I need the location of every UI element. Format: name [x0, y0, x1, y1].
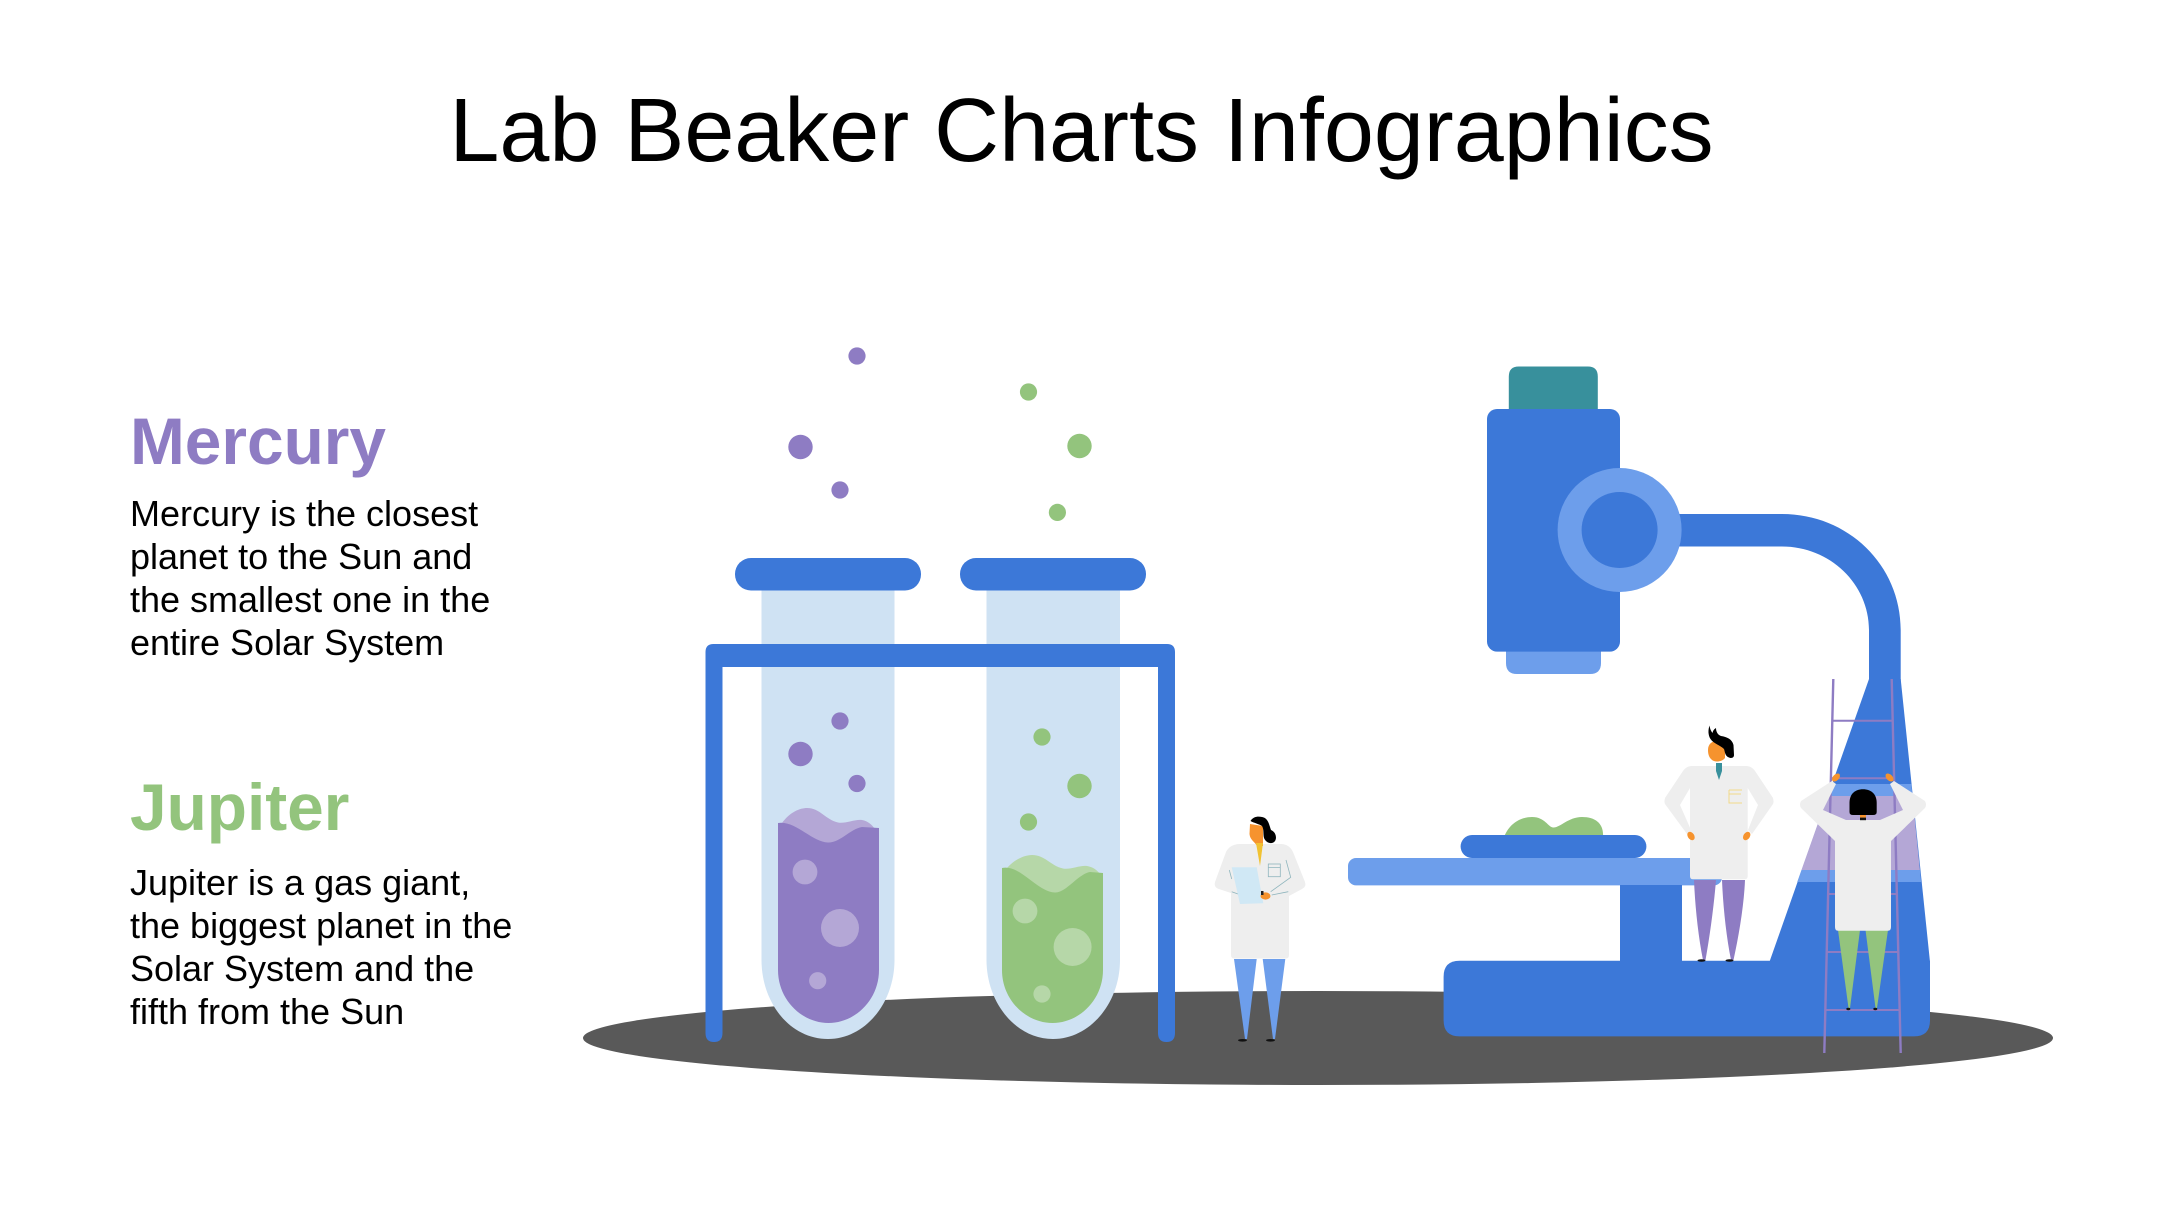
- text block: Jupiter description: fifth from the Sun: [130, 991, 404, 1032]
- panel: Mercury text: [130, 404, 490, 663]
- tube cap: [960, 558, 1146, 590]
- liquid foam: [782, 808, 875, 846]
- liquid: [778, 823, 879, 1023]
- text block: Mercury description: the smallest one in the: [130, 579, 490, 620]
- legs: [1838, 930, 1888, 1008]
- text block: Jupiter description: Jupiter is a gas giant,: [130, 862, 470, 903]
- base: [1444, 961, 1930, 1036]
- stand coloured bands: [1797, 784, 1921, 882]
- head: [1708, 741, 1725, 762]
- watch: [1261, 891, 1264, 895]
- text block: Mercury description: entire Solar System: [130, 622, 444, 663]
- figure: scientist with hands on hips: [1664, 726, 1774, 962]
- coat pocket: [1729, 790, 1742, 803]
- panel: Jupiter text: [130, 770, 512, 1032]
- text block: Mercury description: planet to the Sun and: [130, 536, 472, 577]
- body tube: [1487, 409, 1620, 652]
- rising bubbles above the tube: [1020, 383, 1092, 521]
- text block: Mercury description: Mercury is the closest: [130, 493, 478, 534]
- text block: Jupiter description: Solar System and the: [130, 948, 474, 989]
- lab coat: [1215, 844, 1305, 958]
- test tube: purple: [735, 347, 921, 1039]
- shoes: [1238, 1039, 1275, 1042]
- test tube rack: [706, 644, 1175, 1042]
- stand: [1769, 679, 1930, 962]
- figure: scientist climbing ladder: [1800, 772, 1926, 1010]
- hair: [1708, 726, 1734, 758]
- legs: [1694, 880, 1745, 960]
- hair: [1250, 817, 1276, 843]
- tube glass: [986, 590, 1120, 1039]
- liquid: [1002, 868, 1103, 1023]
- neck: [1860, 815, 1866, 818]
- shoes: [1698, 959, 1734, 962]
- heading: Mercury: Mercury: [130, 404, 386, 478]
- heading: Jupiter: Jupiter: [130, 770, 349, 844]
- hand: [1260, 892, 1270, 900]
- curved arm: [1670, 514, 1901, 685]
- coat details: [1229, 860, 1291, 895]
- slide: [1461, 835, 1646, 858]
- hands: [1830, 772, 1895, 783]
- hands: [1686, 830, 1752, 842]
- hair: [1850, 789, 1877, 815]
- stage column: [1620, 885, 1682, 963]
- liquid foam: [1007, 855, 1100, 896]
- microscope: [1348, 366, 1940, 1036]
- neck: [1256, 843, 1263, 866]
- bubbles inside the tube: [1020, 728, 1092, 831]
- clipboard: [1232, 867, 1263, 904]
- specimen: [1504, 817, 1603, 837]
- rising bubbles above the tube: [788, 347, 866, 499]
- lab coat: [1664, 766, 1774, 879]
- eyepiece: [1509, 366, 1598, 409]
- head: [1250, 824, 1263, 846]
- test tube: green: [960, 383, 1146, 1039]
- title: Lab Beaker Charts Infographics: [449, 81, 1714, 181]
- tie: [1716, 763, 1722, 780]
- tube cap: [735, 558, 921, 590]
- tube glass: [762, 590, 894, 1039]
- text block: Jupiter description: the biggest planet in the: [130, 905, 512, 946]
- liquid bubbles: [1013, 899, 1092, 1003]
- ladder: [1824, 679, 1901, 1053]
- ground shadow: [583, 991, 2053, 1085]
- stage: [1348, 858, 1722, 885]
- legs: [1234, 959, 1285, 1039]
- figure: scientist with clipboard: [1215, 817, 1305, 1042]
- liquid bubbles: [793, 860, 859, 989]
- focus knob: [1558, 468, 1682, 592]
- bubbles inside the tube: [788, 712, 866, 792]
- lower lens: [1506, 645, 1601, 674]
- lab coat with raised arms: [1800, 781, 1926, 931]
- shoes: [1846, 1008, 1877, 1010]
